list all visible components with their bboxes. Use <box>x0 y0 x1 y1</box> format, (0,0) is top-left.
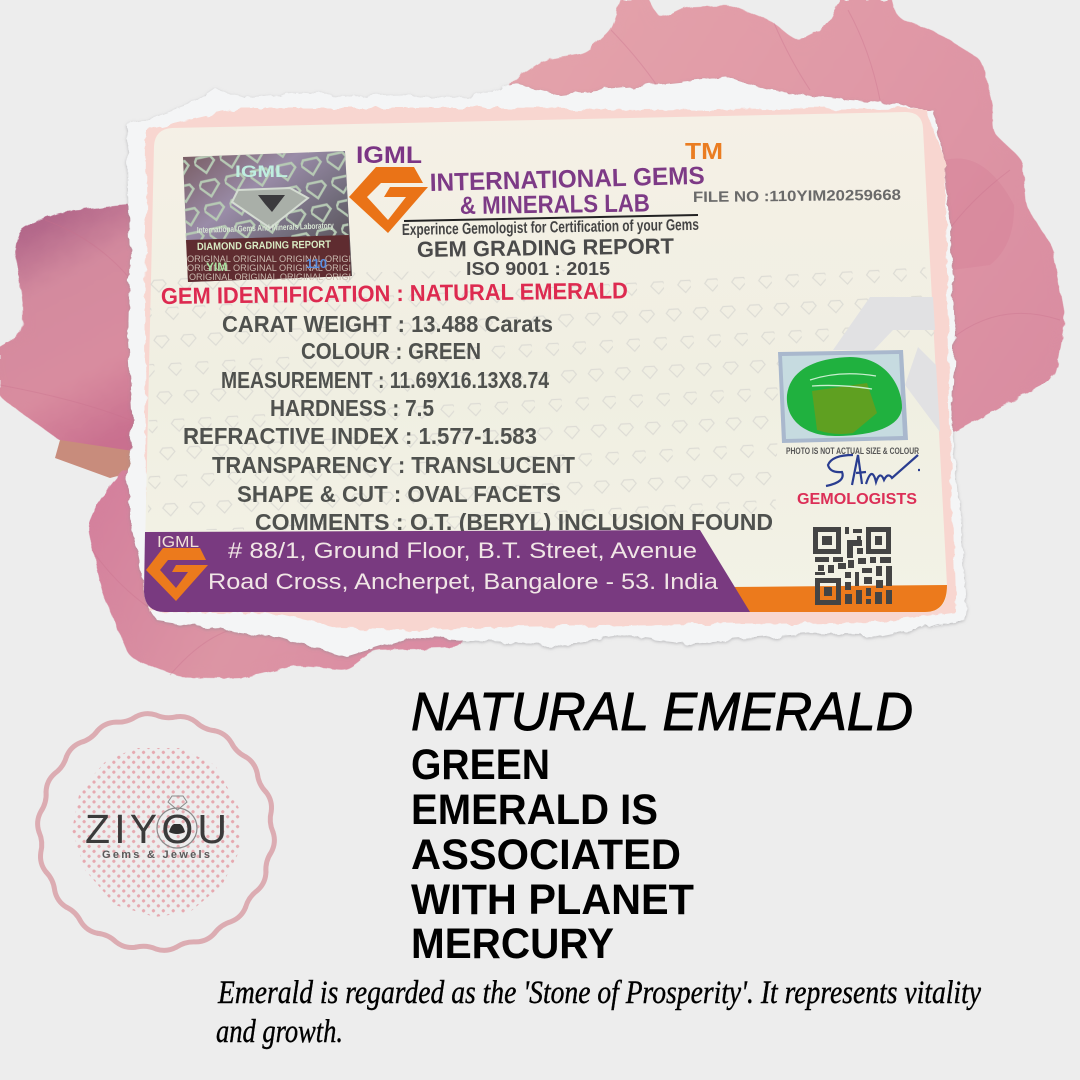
band G emblem <box>146 548 208 601</box>
petals: decorative pink pressed flowers <box>0 0 1065 678</box>
brand wordmark: ZIYOU <box>85 806 227 852</box>
purple band <box>144 530 750 612</box>
specification table <box>183 311 773 535</box>
torn paper frame <box>127 77 967 657</box>
card watermark chevron <box>833 297 940 432</box>
certificate card <box>144 112 947 612</box>
line 5: MERCURY <box>411 920 614 968</box>
emerald <box>787 357 902 436</box>
signature <box>826 455 920 486</box>
halftone dots <box>72 748 240 917</box>
hologram report title: DIAMOND GRADING REPORT <box>197 239 332 253</box>
description line 2: and growth. <box>216 1014 343 1050</box>
tagline: Experince Gemologist for Certification of your Gems <box>402 217 699 239</box>
QR code <box>813 527 892 605</box>
IGML wordmark: IGML <box>356 142 422 169</box>
photo frame <box>778 350 908 443</box>
file number: FILE NO :110YIM20259668 <box>693 187 901 206</box>
heading: natural emerald: NATURAL EMERALD <box>411 682 913 742</box>
description <box>216 975 981 1050</box>
spec: refractive index: REFRACTIVE INDEX : 1.577-1.583 <box>183 423 537 449</box>
hologram original rows: ORIGINAL ORIGINAL ORIGINAL ORIGI <box>187 254 351 264</box>
orange bar <box>730 585 947 612</box>
line 2: EMERALD IS <box>411 786 658 834</box>
lab logo <box>349 142 428 233</box>
band IGML: IGML <box>157 534 199 551</box>
wavy circle border <box>31 708 281 956</box>
hologram band <box>186 235 351 282</box>
spec: carat: CARAT WEIGHT : 13.488 Carats <box>222 311 553 337</box>
hologram diamond <box>232 188 308 228</box>
band logo <box>146 534 208 601</box>
bold statement <box>411 741 694 968</box>
ISO: ISO 9001 : 2015 <box>466 259 610 279</box>
hologram original rows: ORIGINAL ORIGINAL ORIGINAL ORIGI <box>189 272 351 282</box>
spec: hardness: HARDNESS : 7.5 <box>270 395 434 421</box>
card body <box>144 112 947 612</box>
brand logo badge <box>31 708 281 956</box>
line: International Gems: INTERNATIONAL GEMS <box>429 162 705 197</box>
petal: left <box>0 205 220 470</box>
brand tagline: Gems & Jewels <box>102 849 210 861</box>
card watermark pattern <box>148 265 936 530</box>
address line 2: Road Cross, Ancherpet, Bangalore - 53. India <box>208 569 719 594</box>
lab name <box>429 162 705 220</box>
line: & Minerals Lab: & MINERALS LAB <box>460 189 650 220</box>
address band <box>144 530 947 612</box>
line 4: WITH PLANET <box>411 876 694 924</box>
spec: measurement: MEASUREMENT : 11.69X16.13X8.74 <box>221 367 549 393</box>
line 1: GREEN <box>411 741 550 789</box>
spec: comments: COMMENTS : O.T. (BERYL) INCLUSION FOUND <box>255 509 773 535</box>
gem identification: GEM IDENTIFICATION : NATURAL EMERALD <box>161 277 628 309</box>
G emblem <box>349 167 428 233</box>
trademark: TM <box>685 138 723 164</box>
hologram base <box>183 151 352 282</box>
underline <box>404 215 698 221</box>
spec: transparency: TRANSPARENCY : TRANSLUCENT <box>212 452 575 478</box>
spec: shape: SHAPE & CUT : OVAL FACETS <box>237 481 561 507</box>
spec: colour: COLOUR : GREEN <box>301 338 481 364</box>
gem photo <box>778 350 919 456</box>
report title: GEM GRADING REPORT <box>417 233 675 262</box>
pink paper interior <box>145 108 956 630</box>
petal: lower left <box>88 467 480 678</box>
hologram sticker: 110 <box>306 256 327 271</box>
hologram serial: YIM <box>206 260 227 274</box>
gemologists label: GEMOLOGISTS <box>797 491 917 508</box>
hologram sticker <box>183 151 352 282</box>
petal: inner overlap right <box>945 158 1014 270</box>
hologram IGML: IGML <box>235 162 288 181</box>
address line 1: # 88/1, Ground Floor, B.T. Street, Avenue <box>228 538 697 563</box>
hologram original rows: ORIGINAL ORIGINAL ORIGINAL ORIGI <box>187 263 351 273</box>
ring icon <box>157 796 197 848</box>
hologram original rows <box>187 254 351 282</box>
petal: upper right <box>505 0 1065 433</box>
photo disclaimer: PHOTO IS NOT ACTUAL SIZE & COLOUR <box>786 446 919 456</box>
petal: stem <box>55 440 140 478</box>
line 3: ASSOCIATED <box>411 831 681 879</box>
hologram lab name: International Gems And Minerals Laboratory <box>197 220 334 235</box>
